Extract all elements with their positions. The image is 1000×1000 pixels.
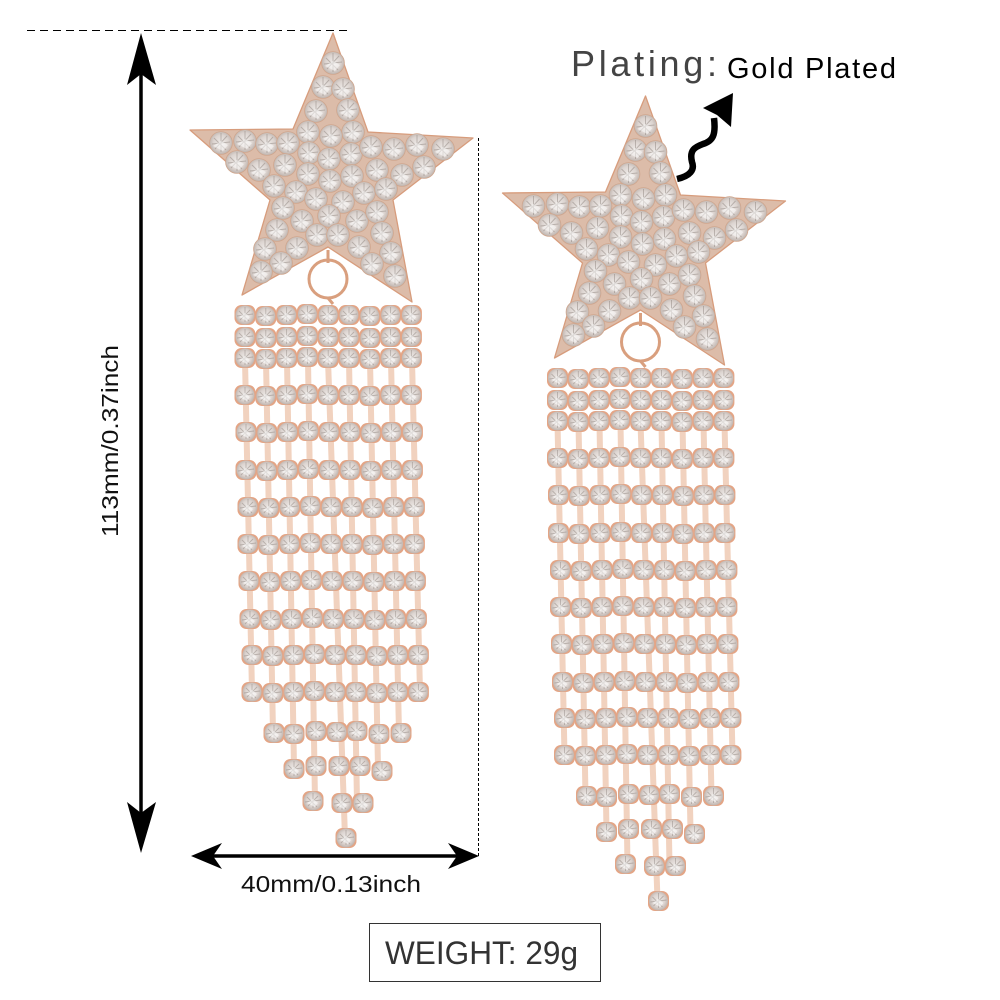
right earring (502, 96, 786, 911)
left earring (190, 33, 473, 848)
star pendant (190, 33, 473, 302)
arrow: wavy plating pointer (677, 93, 733, 179)
arrow: horizontal width dimension (191, 843, 479, 869)
dashed guide: top of height (27, 30, 349, 32)
weight box: WEIGHT: 29g (385, 935, 578, 971)
dashed guide: right of width (478, 138, 480, 856)
arrow: vertical height dimension (127, 33, 156, 853)
weight box (370, 924, 600, 982)
jump ring (309, 250, 347, 304)
label: width: 40mm/0.13inch (241, 871, 421, 897)
label: plating value: Gold Plated (727, 53, 896, 85)
label: height: 113mm/0.37inch (97, 345, 123, 537)
tassel rhinestone rows (234, 304, 429, 848)
label: plating title: Plating: (571, 43, 717, 84)
tassel strands (245, 360, 420, 837)
